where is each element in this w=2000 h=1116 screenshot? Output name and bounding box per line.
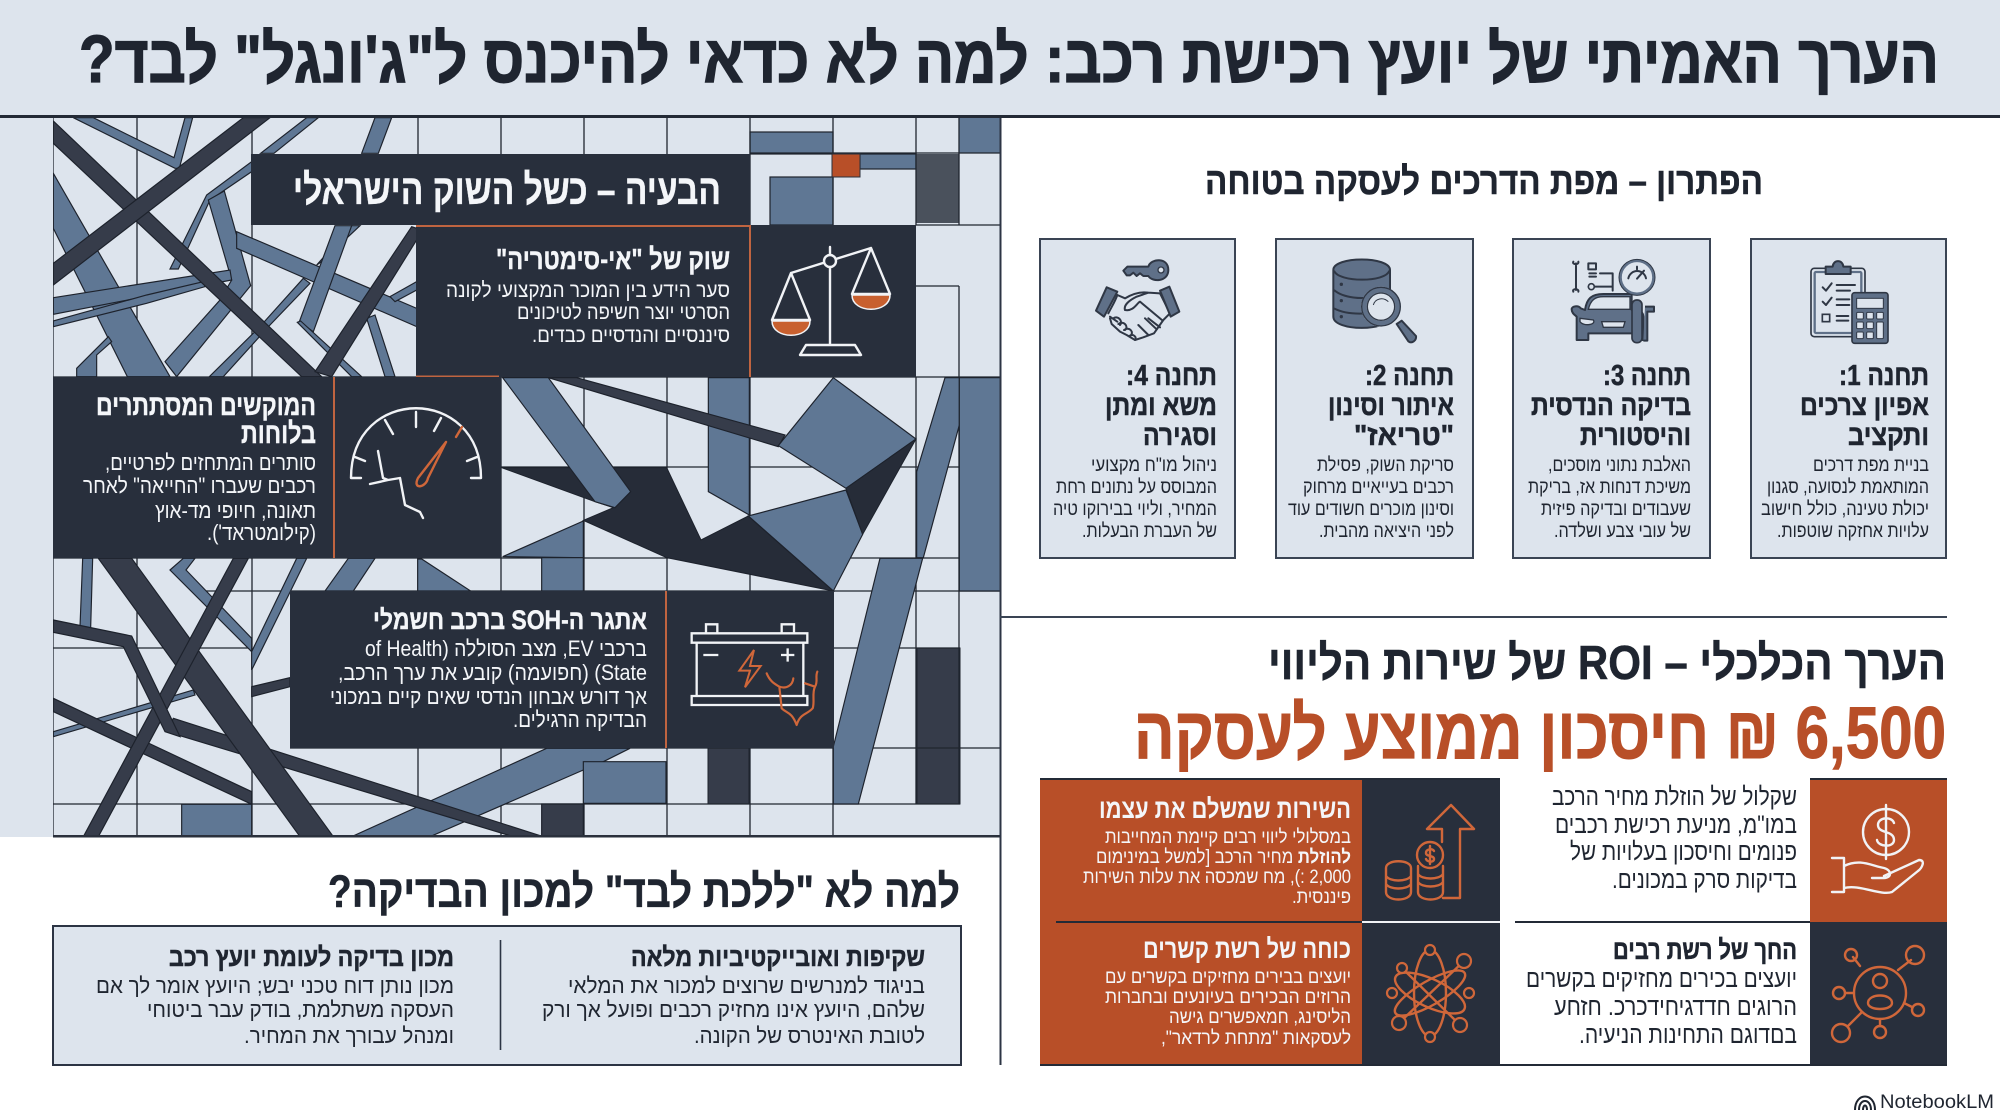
asymmetry body: הסרטי יוצר חשיפה לטיכונים — [517, 301, 730, 324]
column: institute vs consultant: ומנהל עבורך את המחיר. — [244, 1023, 454, 1048]
station 2 body: לפני היציאה מהבית. — [1319, 521, 1454, 542]
station 1 heading: תחנה 1: — [1839, 360, 1929, 392]
icon: hand holding coin — [1832, 805, 1923, 893]
text: power of connections — [1105, 934, 1351, 1049]
icon: clipboard and calculator — [1811, 261, 1888, 343]
hidden mines body: (קילומטראד'). — [207, 520, 316, 545]
SOH body: הבדיקה הרגילים. — [513, 707, 647, 732]
station 3 heading: תחנה 3: — [1603, 360, 1691, 392]
station 4 heading: תחנה 4: — [1126, 360, 1217, 392]
text: saving summary — [1552, 783, 1797, 894]
heading: ROI: הערך הכלכלי – ROI של שירות הליווי — [1268, 637, 1946, 690]
text: power of connections: כוחה של רשת קשרים — [1143, 934, 1351, 964]
station 2 body: וסינון מוכרים חשודים עוד — [1288, 499, 1454, 520]
text: power of connections: לעסקאות "מתחת לרדאר", — [1161, 1028, 1351, 1049]
divider: vertical between columns — [1000, 118, 1002, 1065]
panel: station 4 — [1040, 239, 1235, 558]
hidden mines body — [83, 450, 316, 545]
station 1 body: המותאמת לנסועה, סגנון — [1767, 477, 1929, 498]
heading: why not go alone: למה לא "ללכת לבד" למכון הבדיקה? — [328, 866, 960, 917]
icon: key and handshake — [1096, 260, 1179, 340]
asymmetry heading: שוק של "אי-סימטריה" — [496, 244, 730, 276]
station 1 body: בניית מפת דרכים — [1813, 455, 1929, 476]
text: saving summary: בדיקות סרק במכונים. — [1612, 866, 1797, 894]
hidden mines body: סותרים המתחזים לפרטיים, — [105, 450, 316, 475]
text: saving summary: במו"מ, מניעת רכישת רכבים — [1555, 811, 1797, 839]
text: service pays for itself: להוזלת מחיר הרכב [למשל במינימום — [1096, 847, 1351, 868]
panel: problem heading: הבעיה – כשל השוק הישראלי — [293, 166, 721, 213]
text: service pays for itself — [1083, 794, 1351, 908]
station 3 heading: והיסטורית — [1580, 420, 1691, 452]
column: transparency: לטובת האינטרס של הקונה. — [694, 1023, 925, 1048]
station 4 body — [1053, 455, 1217, 542]
text: power of network: החך של רשת רבים — [1613, 935, 1797, 965]
station 1 heading: אפיון צרכים — [1800, 390, 1929, 422]
station 3 body: שעבודים ובדיקה פיזית — [1541, 499, 1691, 520]
hidden mines heading — [96, 390, 316, 450]
station 2 body — [1288, 455, 1454, 542]
station 4 body: המחיר, וליוי בבירוקו טיה — [1053, 499, 1217, 520]
column: transparency: בניגוד למנרשים שרוצים למכור את המלאי — [568, 973, 925, 998]
NotebookLM badge: NotebookLM — [1880, 1092, 1994, 1113]
group: middle shards — [502, 378, 1002, 804]
icon: coins and rising arrow — [1386, 805, 1474, 900]
station 1 heading: ותקציב — [1848, 420, 1929, 452]
column: transparency: שקיפות ואובייקטיביות מלאה — [631, 942, 925, 972]
text: power of network: הרוגים חדדגיחידכרכ. חזחע — [1554, 993, 1797, 1021]
icon: cracked gauge — [351, 408, 481, 518]
station 2 heading: תחנה 2: — [1365, 360, 1454, 392]
SOH body: ברכבי EV, מצב הסוללה (of Health — [365, 636, 647, 661]
column: transparency: שלהם, היועץ אינו מחזיק רכבים ופועל אך ורק — [542, 997, 925, 1022]
panel: problem heading — [251, 154, 750, 225]
station 3 body: משיכת דנחות אז, בריקת — [1528, 477, 1691, 498]
text: saving summary: פנומים וחיסכון בעלויות של — [1570, 838, 1797, 866]
group: top-left strips — [53, 118, 417, 377]
panel: problem background with tangled road pattern — [0, 116, 1003, 838]
station 4 body: של העברת הבעלות. — [1082, 521, 1217, 542]
station 2 body: רכבים בעייאיים מרחוק — [1303, 477, 1454, 498]
station 2 heading: איתור וסינון — [1328, 390, 1454, 422]
panel: station 2 — [1276, 239, 1473, 558]
text: power of connections: יועצים בבירים מחזיקים בקשרים עם — [1105, 967, 1351, 988]
station 3 heading — [1531, 360, 1691, 452]
panel: hidden mines card — [53, 377, 501, 558]
hidden mines body: רכבים שעברו "החייאה" לאחר — [83, 473, 316, 498]
station 2 heading — [1328, 360, 1454, 452]
column: institute vs consultant: מכון נותן דוח טכני יבש; היועץ אומר לך אם — [96, 973, 454, 998]
station 3 body: של עובי צבע ושלדה. — [1554, 521, 1691, 542]
asymmetry body: סער הידע בין המוכר המקצועי לקונה — [446, 279, 730, 302]
divider: above ROI section — [1000, 616, 1947, 618]
SOH body: State) (חפועמה) קובע את ערך הרכב, — [338, 660, 647, 685]
station 2 heading: "טריאז" — [1354, 420, 1454, 452]
text: power of connections: הרוזים הבכירים בעיונעים ובחברות — [1105, 987, 1351, 1008]
icon: person network — [1832, 946, 1924, 1042]
text: service pays for itself: השירות שמשלם את עצמו — [1099, 794, 1351, 824]
SOH body: אך דורש אבחון הנדסי שאים קיים במכוני — [330, 684, 647, 709]
SOH body — [330, 636, 647, 732]
station 4 heading: וסגירה — [1143, 420, 1217, 452]
station 2 body: סריקת השוק, פסילת — [1317, 455, 1454, 476]
panel: ROI grid — [1040, 779, 1947, 1065]
column: institute vs consultant: העסקה משתלמת, בודק עבר ביטוחי — [147, 997, 454, 1022]
station 1 body: עלויות אחזקה שוטפות. — [1777, 521, 1929, 542]
asymmetry body: סיננסיים והנדסיים כבדים. — [532, 324, 730, 347]
column: transparency — [542, 942, 925, 1048]
icon: car with gauge and tools — [1572, 259, 1655, 343]
panel: station 3 — [1513, 239, 1710, 558]
big number: average saving: 6,500 ₪ חיסכון ממוצע לעסקה — [1134, 693, 1946, 774]
icon: connected nodes — [1387, 945, 1474, 1042]
station 1 body — [1761, 455, 1929, 542]
text: service pays for itself: פיננסית. — [1292, 887, 1351, 908]
SOH heading: אתגר ה-SOH ברכב חשמלי — [373, 605, 647, 635]
icon: balance scales — [772, 247, 890, 355]
header band — [0, 0, 2000, 118]
station 1 body: יכולת טעינה, כולל חישוב — [1761, 499, 1929, 520]
text: power of network: יועצים בכירים מחזיקים בקשרים — [1526, 965, 1797, 993]
text: power of network — [1526, 935, 1797, 1049]
station 3 heading: בדיקה הנדסית — [1531, 390, 1691, 422]
column: institute vs consultant: מכון בדיקה לעומת יועץ רכב — [169, 942, 454, 972]
station 4 heading: משא ומתן — [1105, 390, 1217, 422]
text: service pays for itself: 2,000 :), מח שמכסה את עלות השירות — [1083, 867, 1351, 888]
panel: SOH card — [290, 591, 834, 748]
station 3 body: האלבת נתוני מוסכים, — [1548, 455, 1691, 476]
station 4 body: ניהול מו"ח מקצועי — [1091, 455, 1217, 476]
text: saving summary: שקלול של הוזלת מחיר הרכב — [1552, 783, 1797, 811]
text: service pays for itself: במסלולי ליווי רבים קיימת המחייבות — [1105, 827, 1351, 848]
station 1 heading — [1800, 360, 1929, 452]
icon: database with magnifier — [1333, 259, 1416, 342]
column: institute vs consultant — [96, 942, 454, 1048]
station 3 body — [1528, 455, 1691, 542]
station 4 body: המבוסס על נתונים רחת — [1056, 477, 1217, 498]
asymmetry body — [446, 279, 730, 347]
text: power of connections: הליסינג, חמאפשרים גישה — [1169, 1007, 1351, 1028]
panel: asymmetry card — [416, 225, 916, 377]
heading: solution: הפתרון – מפת הדרכים לעסקה בטוחה — [1205, 161, 1763, 203]
station 4 heading — [1105, 360, 1217, 452]
hidden mines heading: המוקשים המסתתרים — [96, 390, 316, 422]
hidden mines heading: בלוחות — [241, 418, 316, 450]
panel: comparison box — [53, 926, 961, 1065]
panel: station 1 — [1751, 239, 1946, 558]
group: lower strips — [53, 558, 666, 837]
hidden mines body: תאונה, חיופי מד-אוץ — [155, 498, 316, 523]
text: power of network: בםדוגם התחינות הניעיה. — [1579, 1021, 1797, 1049]
icon: damaged battery — [692, 624, 817, 725]
